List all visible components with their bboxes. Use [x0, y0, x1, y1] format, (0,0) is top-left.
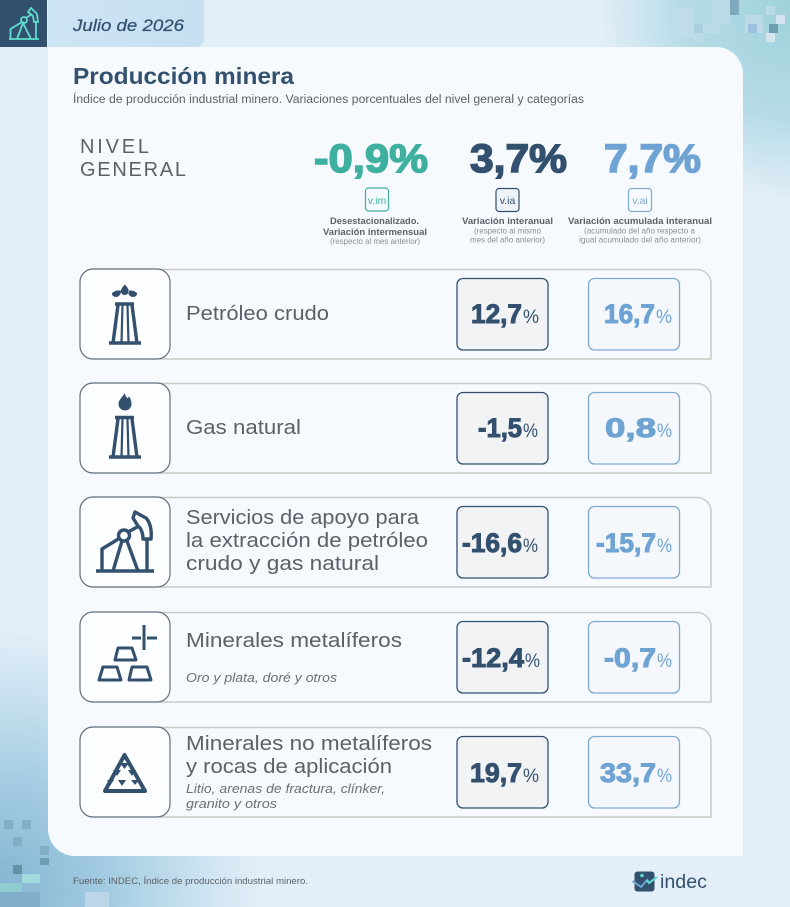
row: minerales no metalíferos: % [523, 766, 539, 787]
label: minerales no metalíferos [186, 733, 432, 778]
metric: v.ai: v.ai [632, 195, 648, 207]
heading: nivel general: GENERAL [80, 159, 186, 181]
metric: v.ai: 7,7% [604, 137, 701, 181]
row: gas natural: 0,8 [605, 413, 656, 443]
row: minerales no metalíferos: % [657, 766, 672, 787]
row: gas natural: Gas natural [186, 417, 301, 439]
metric: v.im [314, 137, 428, 246]
icon: rock pile triangle [105, 755, 145, 791]
row: servicios de apoyo: % [657, 536, 672, 557]
metric: v.im: -0,9% [314, 137, 428, 181]
metric: v.im: Desestacionalizado. [330, 216, 419, 227]
metric: v.im: (respecto al mes anterior) [330, 237, 420, 246]
label: servicios de apoyo: Servicios de apoyo para [186, 507, 420, 529]
label: servicios de apoyo: la extracción de petróleo [186, 530, 428, 552]
row: minerales metalíferos [80, 612, 711, 702]
row: servicios de apoyo: % [523, 536, 538, 557]
row: gas natural: -1,5 [478, 413, 522, 443]
row: minerales metalíferos: Minerales metalíferos [186, 630, 402, 652]
icon: gas rig with flame [109, 393, 141, 457]
date tab [48, 0, 204, 47]
row: minerales metalíferos: -12,4 [462, 643, 524, 673]
metric: v.ai: Variación acumulada interanual [568, 216, 712, 227]
metric: v.ai: igual acumulado del año anterior) [579, 236, 701, 244]
row: minerales metalíferos: -0,7 [604, 643, 656, 673]
row: petróleo crudo: % [656, 307, 672, 328]
heading: nivel general [80, 136, 186, 181]
sublabel: examples: granito y otros [186, 797, 277, 811]
sublabel: examples [186, 782, 385, 811]
row: servicios de apoyo: -15,7 [596, 528, 656, 558]
label: servicios de apoyo [186, 507, 428, 575]
metric: v.ia: mes del año anterior) [470, 236, 545, 244]
metric: v.ia: Variación interanual [462, 216, 553, 227]
source note: Fuente: INDEC, Índice de producción industrial minero. [73, 876, 308, 887]
row: gas natural [80, 383, 711, 473]
metric: v.ia: v.ia [500, 195, 515, 207]
metric: v.ai: (acumulado del año respecto a [584, 226, 696, 236]
row: petróleo crudo: 16,7 [604, 299, 655, 329]
main panel [48, 47, 743, 856]
metric: v.ia: (respecto al mismo [474, 226, 542, 236]
logo: indec [632, 872, 707, 893]
header icon: oil pump [0, 0, 47, 47]
sublabel: examples: Litio, arenas de fractura, clínker, [186, 782, 385, 796]
row: servicios de apoyo [80, 497, 711, 587]
row: petróleo crudo: 12,7 [471, 299, 522, 329]
label: servicios de apoyo: crudo y gas natural [186, 553, 379, 575]
row: petróleo crudo: Petróleo crudo [186, 303, 329, 325]
icon: oil rig with drops [109, 284, 141, 343]
metric: v.ia: 3,7% [470, 137, 567, 181]
date tab: Julio de 2026 [72, 16, 185, 35]
row: minerales metalíferos: % [657, 651, 672, 672]
row: minerales metalíferos: % [525, 651, 540, 672]
row: gas natural: % [657, 421, 672, 442]
metric: v.ia [462, 137, 567, 244]
row: minerales no metalíferos: 33,7 [600, 758, 656, 788]
logo: indec: indec [660, 872, 707, 893]
label: minerales no metalíferos: Minerales no metalíferos [186, 733, 432, 755]
row: servicios de apoyo: -16,6 [462, 528, 522, 558]
icon: oil pump [96, 512, 154, 571]
title: Producción minera [73, 63, 294, 89]
row: petróleo crudo: % [523, 307, 539, 328]
heading: nivel general: NIVEL [80, 136, 149, 158]
metric: v.ai [568, 137, 712, 244]
row: minerales no metalíferos: 19,7 [470, 758, 522, 788]
row: petróleo crudo [80, 269, 711, 359]
subtitle: Índice de producción industrial minero. Variaciones porcentuales del nivel general y categorías [73, 93, 584, 106]
metric: v.im: v.im [368, 195, 386, 207]
row: gas natural: % [523, 421, 538, 442]
row: minerales metalíferos: Oro y plata, doré y otros [186, 671, 337, 685]
icon: gold bars with sparkle [99, 625, 157, 680]
metric: v.im: Variación intermensual [323, 227, 427, 238]
row: minerales no metalíferos [80, 727, 711, 817]
label: minerales no metalíferos: y rocas de aplicación [186, 756, 392, 778]
